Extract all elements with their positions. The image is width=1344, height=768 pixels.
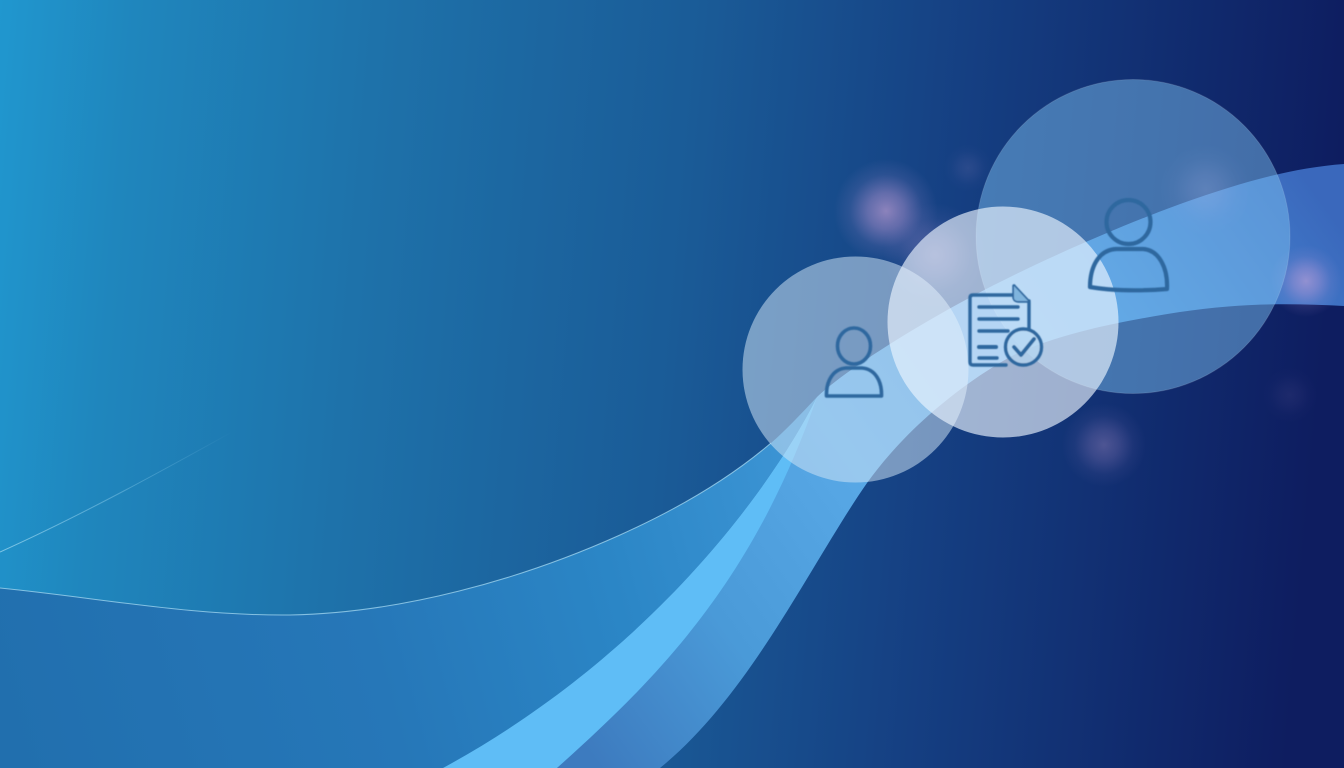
faint upper curve line <box>0 432 232 552</box>
icon: person right <box>1090 200 1167 290</box>
wave highlight line <box>0 443 771 615</box>
circle: small left <box>742 256 968 482</box>
icon: person left <box>826 328 882 396</box>
glow spots <box>834 144 1342 487</box>
bright ribbon <box>443 397 817 768</box>
wave band: wide light ribbon to the right <box>557 164 1344 768</box>
wave band: lower left <box>0 397 817 768</box>
circle: large right <box>976 80 1290 394</box>
icon: document with check mark <box>970 286 1042 365</box>
circle: middle <box>888 206 1118 438</box>
